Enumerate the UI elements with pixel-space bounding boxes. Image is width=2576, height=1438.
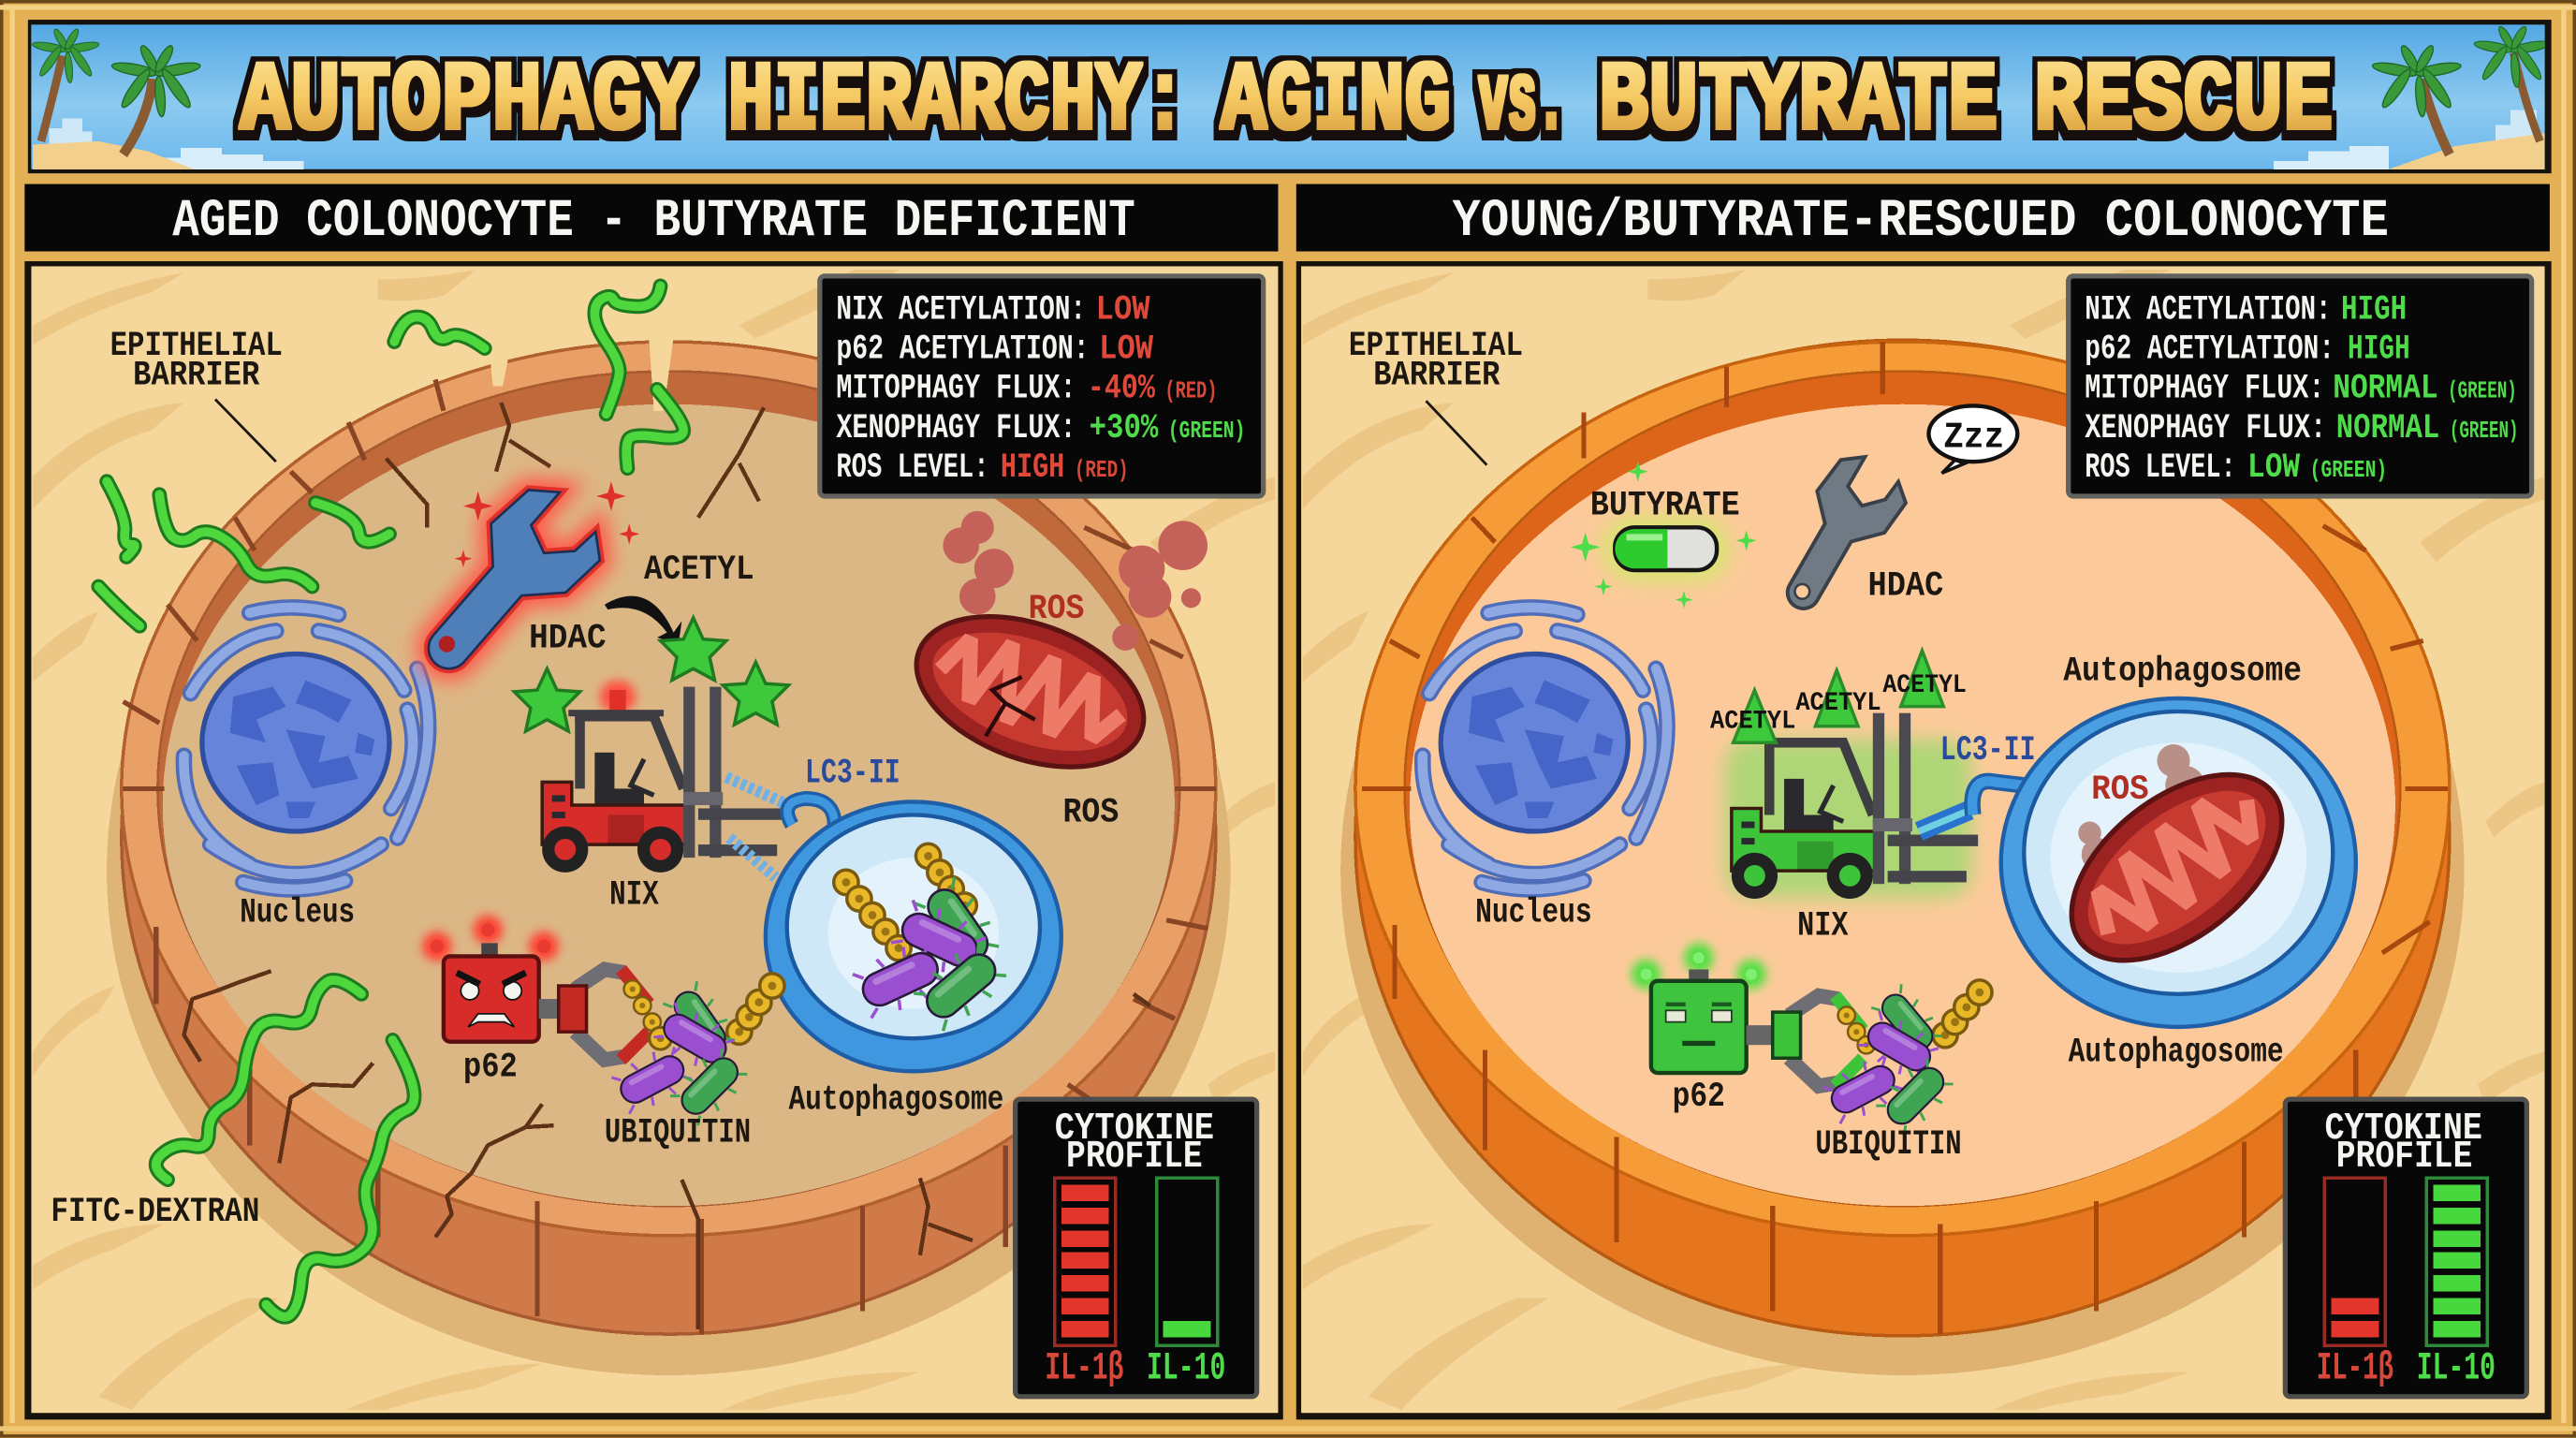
- stats panel: aged: -40%: [1088, 370, 1156, 409]
- arrow: acetyl removal: [605, 596, 681, 644]
- label: epithelial barrier: [110, 327, 283, 462]
- icon: red NIX forklift: [542, 681, 788, 873]
- icon: acetyl tags on forklift: [1710, 651, 1967, 742]
- stats panel: aged: (RED): [1164, 377, 1218, 405]
- stats panel: aged: p62 ACETYLATION:: [836, 330, 1090, 370]
- label: ubiquitin: UBIQUITIN: [605, 1114, 751, 1153]
- label: LC3-II: LC3-II: [805, 754, 900, 793]
- icon: acetyl tags on forklift: ACETYL: [1882, 671, 1967, 700]
- label: epithelial barrier: BARRIER: [133, 357, 260, 396]
- label: HDAC: HDAC: [1868, 566, 1943, 606]
- stats panel: aged: (GREEN): [1168, 417, 1245, 445]
- cell: cracked epithelial ring: [107, 337, 1231, 1375]
- icon: butyrate capsule: [1571, 462, 1757, 609]
- icon: claw gripper and ubiquitinated bacteria: [539, 969, 784, 1128]
- label: p62: p62: [463, 1049, 518, 1088]
- bar: IL-1 beta high: [1055, 1178, 1116, 1345]
- stats panel: young: MITOPHAGY FLUX:: [2085, 370, 2324, 409]
- icon: nucleus: [183, 608, 429, 889]
- label: ROS red: ROS: [1029, 590, 1084, 629]
- cytokine panel: aged: [1016, 1099, 1257, 1397]
- bar: IL-10 high: [2426, 1178, 2487, 1345]
- label: ROS: ROS: [1063, 794, 1119, 833]
- speech bubble: Zzz: Zzz: [1943, 417, 2004, 458]
- stats panel: aged: NIX ACETYLATION:: [836, 290, 1086, 330]
- icon: autophagosome with bacteria: [766, 799, 1061, 1071]
- title banner: [31, 24, 2551, 169]
- stats panel: young: p62 ACETYLATION:: [2085, 330, 2334, 370]
- title text: [240, 46, 2333, 158]
- label: epithelial barrier: BARRIER: [1373, 357, 1500, 396]
- panel: aged colonocyte: [31, 266, 1278, 1413]
- icon: damaged mitochondrion with ROS smoke: [914, 511, 1208, 770]
- stats panel: young: XENOPHAGY FLUX:: [2085, 409, 2326, 448]
- panel header: young: YOUNG/BUTYRATE-RESCUED COLONOCYTE: [1453, 191, 2389, 251]
- LC3 link beam: [1919, 810, 1969, 831]
- cytokine panel: aged: PROFILE: [1066, 1136, 1203, 1179]
- icon: acetyl tags on forklift: ACETYL: [1795, 689, 1881, 718]
- dashed LC3 link: [726, 777, 788, 877]
- stats panel: young: (GREEN): [2450, 417, 2519, 445]
- title text: BUTYRATE: [1599, 46, 1998, 158]
- label: p62: p62: [1673, 1078, 1725, 1117]
- label: ACETYL: ACETYL: [644, 550, 754, 590]
- icon: active HDAC wrench: [398, 472, 639, 700]
- title text: HIERARCHY:: [728, 46, 1188, 158]
- stats panel: aged: (RED): [1075, 456, 1129, 484]
- icon: nucleus: [1423, 608, 1667, 889]
- cytokine panel: young: IL-10: [2417, 1345, 2496, 1390]
- stats panel: young: (GREEN): [2448, 377, 2517, 405]
- icon: angry red p62 robot: [422, 916, 559, 1042]
- stats panel: young: HIGH: [2348, 330, 2410, 370]
- stats panel: aged: HIGH: [1001, 448, 1064, 488]
- label: NIX: NIX: [609, 875, 659, 915]
- stats panel: young: (GREEN): [2310, 456, 2387, 484]
- label: epithelial barrier: [1349, 327, 1523, 465]
- cytokine panel: young: IL-1β: [2317, 1345, 2393, 1390]
- label: LC3-II: LC3-II: [1940, 731, 2036, 770]
- label: epithelial barrier: EPITHELIAL: [1349, 327, 1523, 366]
- title text: AGING: [1221, 46, 1451, 158]
- stats panel: young: ROS LEVEL:: [2085, 448, 2236, 488]
- icon: claw gripper and ubiquitinated bacteria: [1747, 980, 1992, 1138]
- stats panel: aged: MITOPHAGY FLUX:: [836, 370, 1076, 409]
- cytokine panel: young: PROFILE: [2336, 1136, 2472, 1179]
- stats panel: aged: LOW: [1099, 330, 1154, 370]
- icon: acetyl tags on forklift: ACETYL: [1710, 707, 1795, 736]
- stats panel: young: [2069, 276, 2532, 496]
- label: FITC-dextran: FITC-DEXTRAN: [51, 1193, 259, 1232]
- label: ROS: ROS: [2091, 770, 2149, 810]
- icon: green NIX forklift: [1725, 713, 1978, 899]
- cytokine panel: aged: IL-10: [1147, 1345, 1225, 1390]
- icon: inactive HDAC wrench: [1762, 445, 1915, 628]
- cracks: [184, 403, 1150, 1329]
- bar: IL-10 low: [1157, 1178, 1218, 1345]
- title text: vs.: [1479, 46, 1566, 158]
- stats panel: aged: ROS LEVEL:: [836, 448, 989, 488]
- stats panel: aged: +30%: [1090, 409, 1159, 448]
- label: autophagosome: Autophagosome: [2069, 1034, 2284, 1073]
- stats panel: aged: [820, 276, 1264, 496]
- icon: palm trees left: [32, 27, 201, 154]
- label: HDAC: HDAC: [529, 619, 607, 658]
- cytokine panel: aged: CYTOKINE: [1055, 1108, 1214, 1151]
- label: autophagosome: Autophagosome: [788, 1081, 1003, 1121]
- label: nucleus: Nucleus: [240, 894, 355, 933]
- clouds and beach: [33, 110, 2545, 169]
- stats panel: young: NORMAL: [2333, 370, 2438, 409]
- cytokine panel: aged: IL-1β: [1045, 1345, 1123, 1390]
- stats panel: aged: LOW: [1096, 290, 1150, 330]
- cell: intact epithelial ring: [1340, 340, 2465, 1375]
- label: ubiquitin: UBIQUITIN: [1815, 1125, 1962, 1165]
- stats panel: young: LOW: [2247, 448, 2301, 488]
- icon: autophagosome with mitochondrion: [1972, 698, 2356, 1027]
- stats panel: young: HIGH: [2341, 290, 2407, 330]
- title text: AUTOPHAGY: [240, 46, 694, 158]
- panel header: aged: AGED COLONOCYTE - BUTYRATE DEFICIENT: [172, 191, 1135, 251]
- title text: RESCUE: [2034, 46, 2333, 158]
- cytokine panel: young: CYTOKINE: [2324, 1108, 2482, 1151]
- cytokine panel: young: [2285, 1099, 2526, 1397]
- stats panel: young: NORMAL: [2336, 409, 2439, 448]
- speech bubble: Zzz: [1928, 405, 2017, 473]
- stats panel: young: NIX ACETYLATION:: [2085, 290, 2331, 330]
- panel: young colonocyte: [1301, 266, 2545, 1413]
- beam highlight: [1919, 810, 1969, 831]
- stats panel: aged: XENOPHAGY FLUX:: [836, 409, 1076, 448]
- label: butyrate: BUTYRATE: [1590, 486, 1740, 525]
- bar: IL-1 beta low: [2324, 1178, 2385, 1345]
- icon: palm trees right: [2372, 25, 2551, 154]
- label: nucleus: Nucleus: [1475, 894, 1592, 933]
- label: NIX: NIX: [1797, 907, 1849, 946]
- leaking green bacteria worms: [98, 286, 683, 1317]
- label: epithelial barrier: EPITHELIAL: [110, 327, 283, 366]
- icon: calm green p62 robot: [1632, 943, 1766, 1073]
- icon: acetyl stars: [514, 618, 788, 731]
- label: autophagosome top: Autophagosome: [2063, 653, 2302, 692]
